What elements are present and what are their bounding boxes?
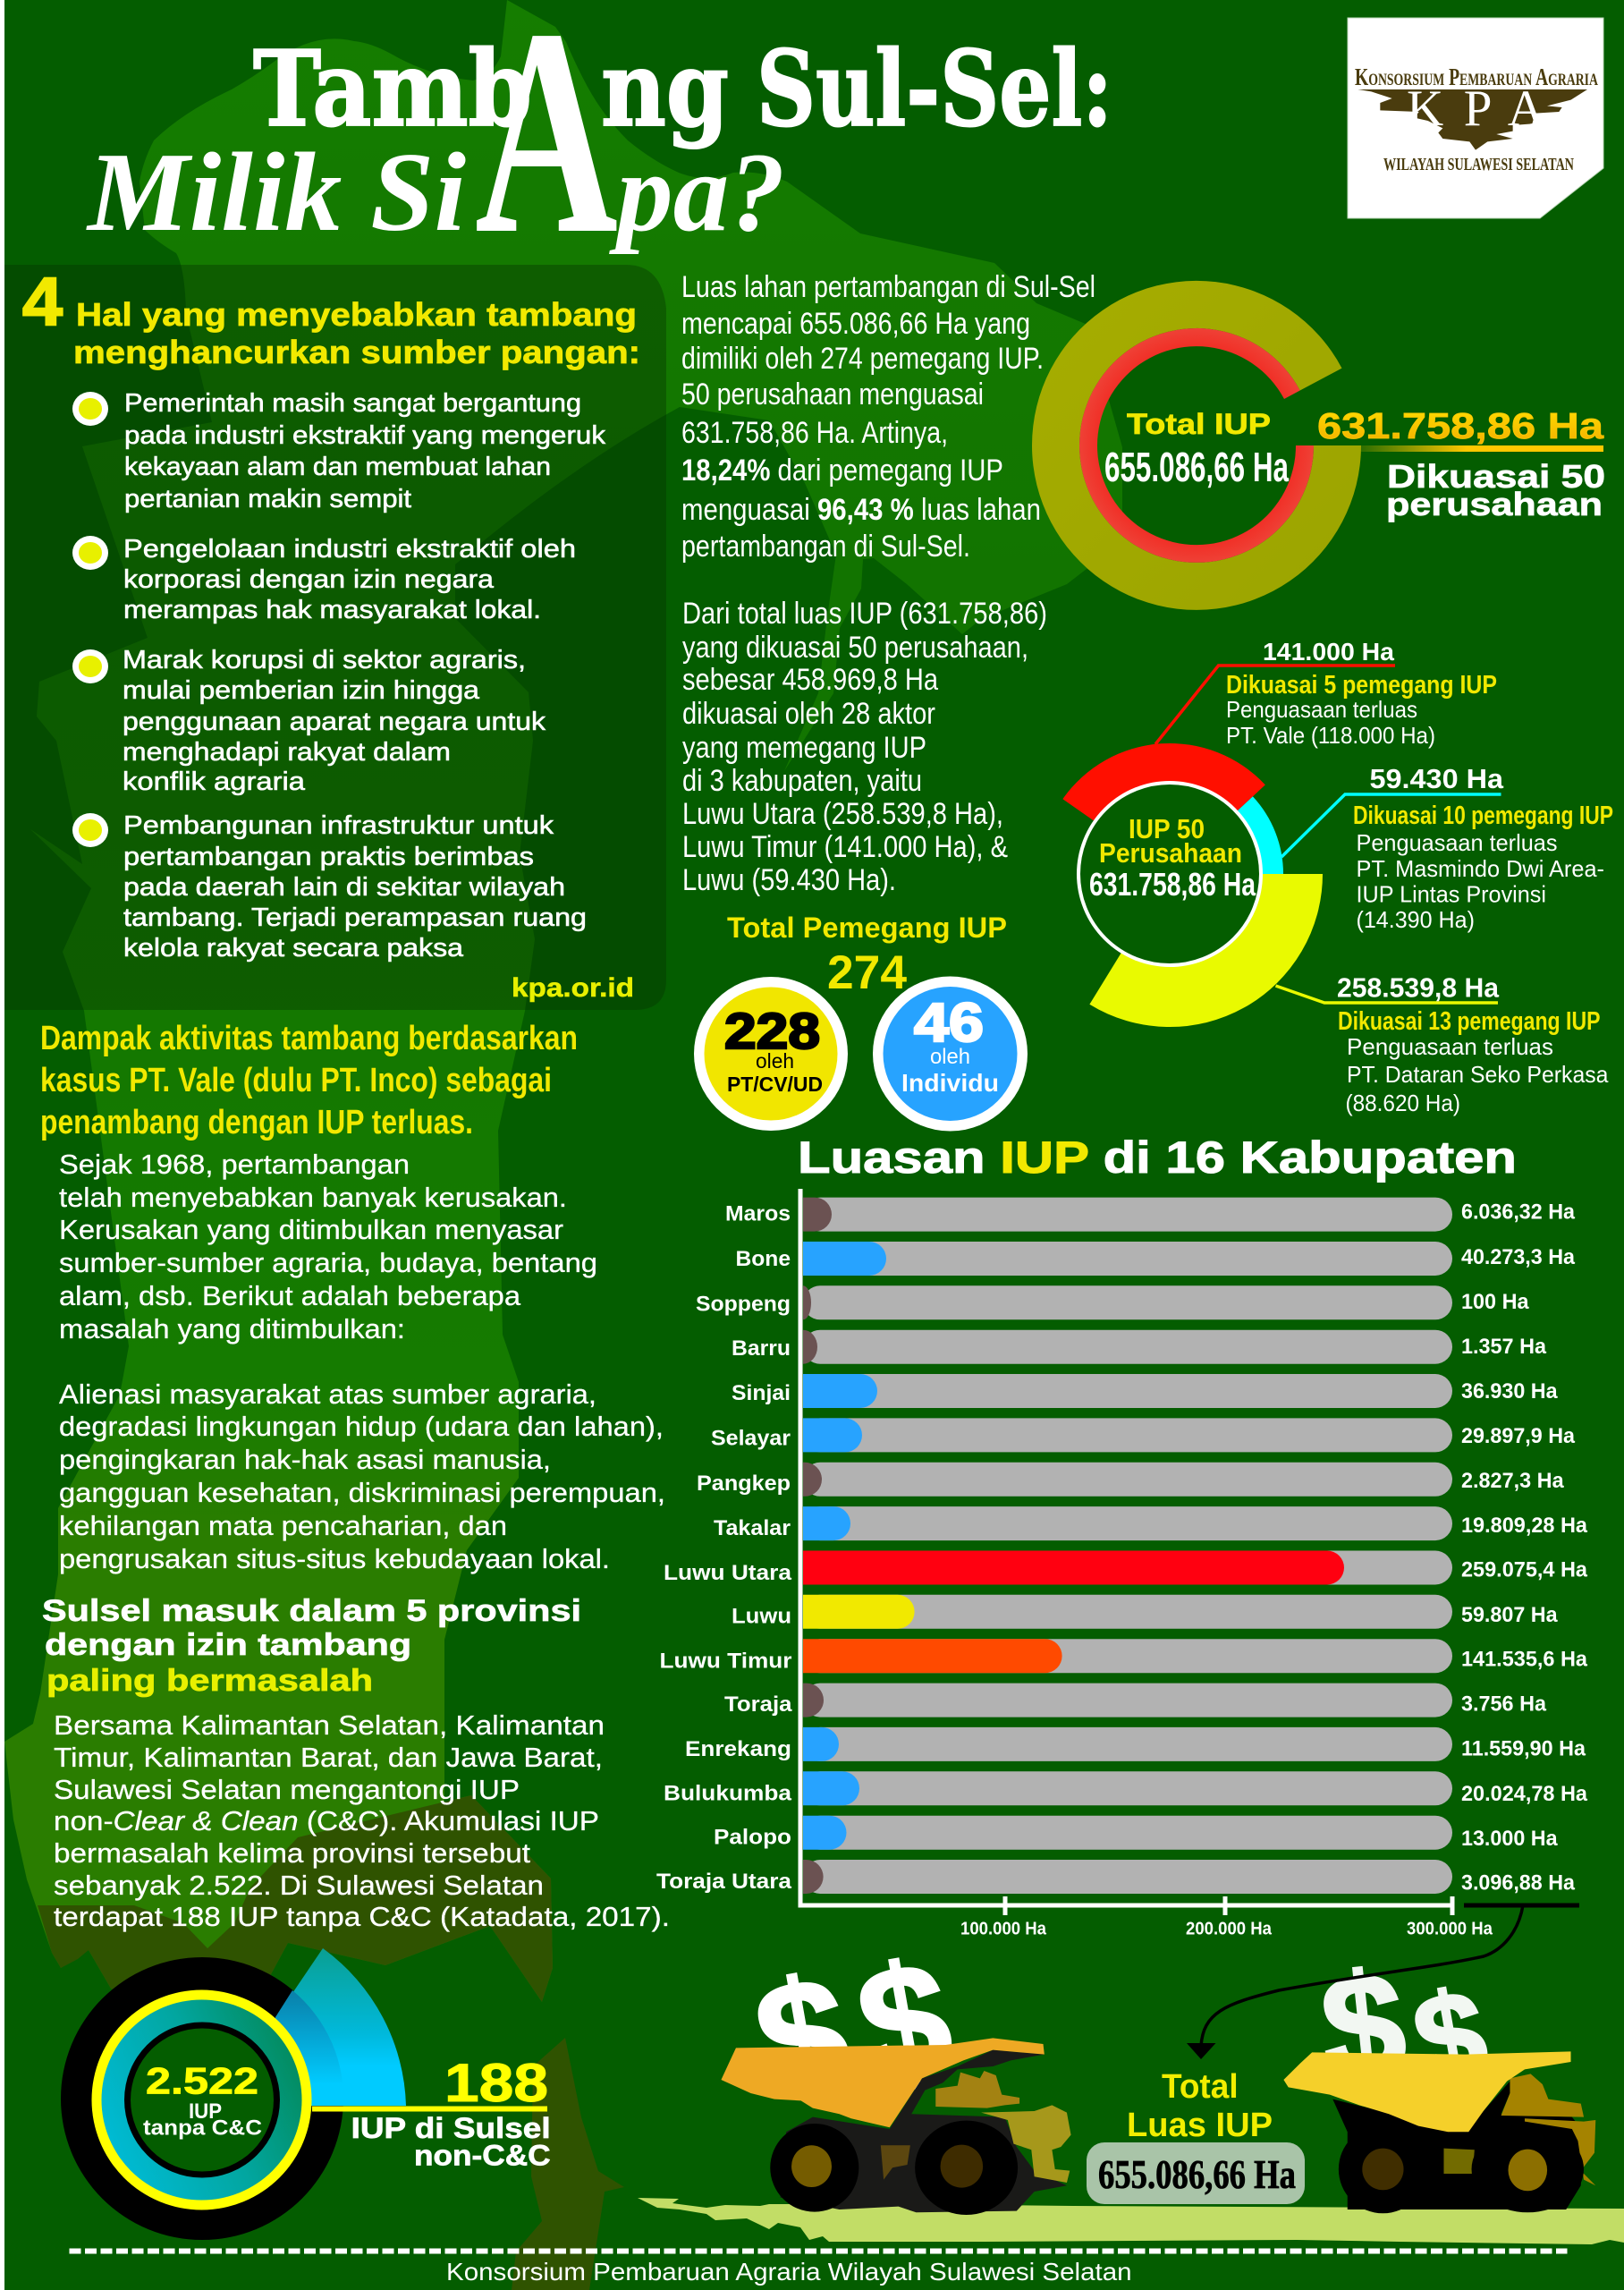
text block: izin non C&C: Bersama Kalimantan Selatan, Kalimantan <box>54 1709 605 1741</box>
text block: dampak <box>59 1149 665 1574</box>
text block: luas lahan: Luas lahan pertambangan di Sul-Sel <box>681 270 1095 304</box>
bar chart: luasan IUP di 16 kabupaten: 19.809,28 Ha <box>1461 1514 1588 1538</box>
bar chart: luasan IUP di 16 kabupaten: Barru <box>732 1336 791 1361</box>
bar chart: luasan IUP di 16 kabupaten: 40.273,3 Ha <box>1461 1245 1576 1269</box>
bar chart: luasan IUP di 16 kabupaten: Luwu Utara <box>664 1561 792 1585</box>
bar chart: luasan IUP di 16 kabupaten: 1.357 Ha <box>1461 1335 1547 1359</box>
circle: 228 PT/CV/UD <box>694 977 848 1131</box>
text block: 50 perusahaan: yang memegang IUP <box>682 731 926 765</box>
text block: izin non C&C: bermasalah kelima provinsi tersebut <box>54 1837 530 1869</box>
total luas IUP callout: 655.086,66 Ha <box>1098 2151 1296 2197</box>
callout: 59.430 Ha: Penguasaan terluas <box>1356 829 1558 856</box>
bar chart: luasan IUP di 16 kabupaten: Soppeng <box>696 1292 791 1316</box>
donut centre label: Perusahaan <box>1099 837 1242 869</box>
donut centre label: 2.522 <box>146 2059 258 2102</box>
main title: ng <box>601 29 729 150</box>
heading: dampak aktivitas tambang: penambang dengan IUP terluas. <box>40 1104 473 1141</box>
text block: luas lahan: 18,24% dari pemegang IUP <box>681 454 1003 488</box>
truck left: $ <box>845 1927 963 2117</box>
text block: luas lahan: 50 perusahaan menguasai <box>681 377 984 411</box>
bullet 4: pertambangan praktis berimbas <box>123 843 534 871</box>
bullet 1: Pemerintah masih sangat bergantung <box>124 389 581 418</box>
bar chart: luasan IUP di 16 kabupaten: Palopo <box>714 1826 791 1850</box>
donut centre label <box>1089 813 1256 903</box>
bar chart: luasan IUP di 16 kabupaten: 36.930 Ha <box>1461 1379 1558 1404</box>
chart: IUP 50 perusahaan donut <box>1062 638 1613 1116</box>
text block: izin non C&C <box>54 1709 670 1932</box>
bullet 3 <box>72 646 546 796</box>
total luas IUP callout: Total <box>1162 2068 1239 2106</box>
bar chart: luasan IUP di 16 kabupaten: Pangkep <box>697 1472 791 1496</box>
callout: 258.539,8 Ha: 258.539,8 Ha <box>1337 971 1500 1004</box>
text block: izin non C&C: terdapat 188 IUP tanpa C&C (Katadata, 2017). <box>54 1901 670 1932</box>
callout: 59.430 Ha: IUP Lintas Provinsi <box>1356 880 1546 907</box>
panel: 4 causes <box>4 264 666 1010</box>
bar chart: luasan IUP di 16 kabupaten: 29.897,9 Ha <box>1461 1424 1576 1448</box>
callout: 141.000 Ha: PT. Vale (118.000 Ha) <box>1226 722 1435 749</box>
text block: dampak: kehilangan mata pencaharian, dan <box>59 1510 507 1541</box>
circle: 228 PT/CV/UD: oleh <box>756 1049 794 1073</box>
bullet 2: Pengelolaan industri ekstraktif oleh <box>123 535 576 564</box>
bar chart: luasan IUP di 16 kabupaten: 20.024,78 Ha <box>1461 1782 1588 1806</box>
bar chart: luasan IUP di 16 kabupaten: 141.535,6 Ha <box>1461 1648 1588 1672</box>
text block: izin non C&C: sebanyak 2.522. Di Sulawesi Selatan <box>54 1870 544 1901</box>
text block: luas lahan <box>681 270 1095 564</box>
text block: dampak: pengingkaran hak-hak asasi manusia, <box>59 1444 551 1475</box>
text block: 50 perusahaan: di 3 kabupaten, yaitu <box>682 764 922 798</box>
bullet 4: kelola rakyat secara paksa <box>123 934 464 963</box>
bullet 1 <box>72 389 606 513</box>
bar chart: luasan IUP di 16 kabupaten: Bulukumba <box>664 1781 792 1805</box>
text block: 50 perusahaan: dikuasai oleh 28 aktor <box>682 697 935 731</box>
bullet 1: kekayaan alam dan membuat lahan <box>124 453 551 481</box>
callout 188 <box>351 2053 551 2172</box>
heading: 4 causes: menghancurkan sumber pangan: <box>73 334 640 370</box>
text block: dampak: Sejak 1968, pertambangan <box>59 1149 410 1180</box>
text block: dampak: gangguan kesehatan, diskriminasi perempuan, <box>59 1477 665 1508</box>
background map lower olive area <box>38 1795 553 2022</box>
callout 631.758,86 Ha: 631.758,86 Ha <box>1317 405 1604 446</box>
truck right <box>1283 1940 1595 2213</box>
value box <box>1087 2142 1305 2204</box>
text block: dampak: Kerusakan yang ditimbulkan menyasar <box>59 1214 563 1245</box>
callout: 59.430 Ha <box>1281 763 1613 933</box>
truck right: $ <box>1404 1962 1496 2113</box>
heading: dampak aktivitas tambang <box>40 1020 578 1141</box>
dollar signs: $ <box>1314 1940 1413 2112</box>
bar chart: luasan IUP di 16 kabupaten: 2.827,3 Ha <box>1461 1469 1564 1493</box>
bar chart: luasan IUP di 16 kabupaten: 3.096,88 Ha <box>1461 1871 1576 1896</box>
connector line <box>312 2106 547 2111</box>
text block: 50 perusahaan: Luwu (59.430 Ha). <box>682 863 896 897</box>
heading: sulsel masuk 5 provinsi <box>42 1594 581 1698</box>
callout: 258.539,8 Ha: (88.620 Ha) <box>1345 1090 1460 1116</box>
text block: luas lahan: 631.758,86 Ha. Artinya, <box>681 416 948 450</box>
bullet 1: pertanian makin sempit <box>124 485 411 513</box>
callout: 141.000 Ha: Dikuasai 5 pemegang IUP <box>1226 671 1497 700</box>
bar chart: luasan IUP di 16 kabupaten: 100 Ha <box>1461 1290 1529 1314</box>
text block: dampak: Alienasi masyarakat atas sumber agraria, <box>59 1378 596 1410</box>
bar chart: luasan IUP di 16 kabupaten: Toraja <box>724 1692 792 1717</box>
text block: izin non C&C: non-Clear & Clean (C&C). Akumulasi IUP <box>54 1805 599 1836</box>
bullet 3: konflik agraria <box>123 768 306 796</box>
chart axes: 100.000 Ha <box>960 1920 1047 1939</box>
main title: pa? <box>609 131 785 255</box>
bar chart: luasan IUP di 16 kabupaten: Luwu Timur <box>660 1649 792 1673</box>
main title: Sul-Sel: <box>757 29 1112 150</box>
bar chart: luasan IUP di 16 kabupaten: Enrekang <box>685 1737 791 1761</box>
bar chart: luasan IUP di 16 kabupaten: 259.075,4 Ha <box>1461 1557 1588 1582</box>
bar chart: luasan IUP di 16 kabupaten: 11.559,90 Ha <box>1461 1736 1586 1760</box>
bar chart: luasan IUP di 16 kabupaten: 59.807 Ha <box>1461 1603 1558 1627</box>
bullet 3: menghadapi rakyat dalam <box>123 738 451 767</box>
chart: total IUP donut <box>1032 281 1605 610</box>
callout 188: non-C&C <box>414 2140 551 2172</box>
donut centre label: IUP <box>189 2099 222 2124</box>
text block: dampak: alam, dsb. Berikut adalah beberapa <box>59 1280 521 1311</box>
text block: 50 perusahaan: sebesar 458.969,8 Ha <box>682 663 938 697</box>
callout: 59.430 Ha: 59.430 Ha <box>1370 763 1504 794</box>
chart axes: 300.000 Ha <box>1407 1920 1493 1939</box>
bar chart: luasan IUP di 16 kabupaten: 13.000 Ha <box>1461 1827 1558 1851</box>
bullet 3: penggunaan aparat negara untuk <box>123 708 546 736</box>
callout dikuasai 50 perusahaan: Dikuasai 50 <box>1387 458 1605 495</box>
chart axes: 200.000 Ha <box>1186 1920 1273 1939</box>
bar chart: luasan IUP di 16 kabupaten: Takalar <box>714 1516 791 1540</box>
total pemegang IUP: Total Pemegang IUP <box>727 912 1007 944</box>
text block: luas lahan: menguasai 96,43 % luas lahan <box>681 493 1041 527</box>
bullet 2: merampas hak masyarakat lokal. <box>123 596 541 624</box>
text block: luas lahan: pertambangan di Sul-Sel. <box>681 530 970 564</box>
text block: dampak: masalah yang ditimbulkan: <box>59 1313 405 1344</box>
callout 188: IUP di Sulsel <box>351 2112 551 2144</box>
donut centre label: 655.086,66 Ha <box>1104 444 1289 490</box>
bullet 4: tambang. Terjadi perampasan ruang <box>123 903 587 932</box>
bullet 1: pada industri ekstraktif yang mengeruk <box>124 421 606 450</box>
donut centre label <box>143 2059 262 2140</box>
heading: 4 causes: 4 <box>22 264 63 340</box>
heading: 4 causes <box>22 264 640 370</box>
footer rule <box>70 2249 1567 2254</box>
bullet 3: Marak korupsi di sektor agraris, <box>123 646 526 674</box>
callout: 258.539,8 Ha: Penguasaan terluas <box>1347 1033 1553 1060</box>
arrow connector <box>1187 1905 1579 2059</box>
donut centre label: tanpa C&C <box>143 2116 262 2140</box>
title line one: Tamb <box>253 29 532 150</box>
callout: 258.539,8 Ha <box>1275 971 1609 1116</box>
callout 188: 188 <box>444 2053 548 2113</box>
heading: sulsel masuk 5 provinsi: paling bermasalah <box>47 1664 373 1698</box>
text block: 50 perusahaan: yang dikuasai 50 perusahaan, <box>682 631 1028 665</box>
background map silhouette <box>4 0 1122 2022</box>
source kpa.or.id: kpa.or.id <box>512 973 634 1003</box>
bar chart: luasan IUP di 16 kabupaten: Maros <box>725 1201 791 1226</box>
chart axes <box>800 1189 1493 1939</box>
text block: 50 perusahaan: Luwu Timur (141.000 Ha), & <box>682 830 1008 864</box>
heading: sulsel masuk 5 provinsi: dengan izin tambang <box>45 1628 411 1662</box>
bar chart: luasan IUP di 16 kabupaten <box>656 1132 1588 1939</box>
bullet 4: Pembangunan infrastruktur untuk <box>123 811 554 840</box>
callout: 59.430 Ha: PT. Masmindo Dwi Area- <box>1356 855 1604 882</box>
bar chart: luasan IUP di 16 kabupaten: 3.756 Ha <box>1461 1692 1547 1716</box>
callout: 141.000 Ha: Penguasaan terluas <box>1226 696 1417 723</box>
ground strip <box>638 2198 1624 2244</box>
text block: dampak: sumber-sumber agraria, budaya, bentang <box>59 1247 597 1278</box>
total luas IUP callout <box>1087 2068 1305 2204</box>
bar chart: luasan IUP di 16 kabupaten: Bone <box>735 1247 791 1271</box>
text block: luas lahan: mencapai 655.086,66 Ha yang <box>681 307 1030 341</box>
text block: 50 perusahaan: Dari total luas IUP (631.758,86) <box>682 597 1047 631</box>
heading: 4 causes: Hal yang menyebabkan tambang <box>76 296 637 333</box>
bar chart: luasan IUP di 16 kabupaten: Luwu <box>732 1605 791 1628</box>
title line two: Milik Si <box>86 131 466 255</box>
bullet 3: mulai pemberian izin hingga <box>123 676 480 705</box>
bullet 4: pada daerah lain di sekitar wilayah <box>123 873 565 902</box>
bullet 2 <box>72 535 576 624</box>
bullet 2: korporasi dengan izin negara <box>123 565 495 594</box>
total luas IUP callout: Luas IUP <box>1127 2107 1273 2144</box>
circle: 228 PT/CV/UD: 228 <box>724 1003 820 1060</box>
heading: sulsel masuk 5 provinsi: Sulsel masuk dalam 5 provinsi <box>42 1594 581 1628</box>
circle: 46 individu <box>873 977 1028 1131</box>
callout dikuasai 50 perusahaan: perusahaan <box>1386 486 1603 522</box>
donut centre label: 631.758,86 Ha <box>1089 866 1256 903</box>
text block: izin non C&C: Timur, Kalimantan Barat, dan Jawa Barat, <box>54 1742 603 1773</box>
callout: 141.000 Ha <box>1155 638 1497 749</box>
total pemegang IUP <box>694 912 1028 1131</box>
callout: 59.430 Ha: (14.390 Ha) <box>1356 906 1475 933</box>
truck left <box>721 1927 1071 2215</box>
circle: 46 individu: Individu <box>901 1069 999 1097</box>
main title <box>86 0 1112 295</box>
chart title: Luasan IUP di 16 Kabupaten <box>798 1132 1517 1183</box>
text block: 50 perusahaan <box>682 597 1047 897</box>
bullet 4 <box>72 811 587 963</box>
bar chart: luasan IUP di 16 kabupaten: Sinjai <box>732 1381 791 1405</box>
text block: dampak: telah menyebabkan banyak kerusakan. <box>59 1182 567 1213</box>
text block: dampak: degradasi lingkungan hidup (udara dan lahan), <box>59 1411 664 1442</box>
bar chart: luasan IUP di 16 kabupaten: 6.036,32 Ha <box>1461 1200 1576 1225</box>
callout: 141.000 Ha: 141.000 Ha <box>1263 638 1394 666</box>
logo KPA: KPA <box>1407 81 1544 137</box>
dollar signs: $ <box>743 1942 861 2133</box>
footer text: Konsorsium Pembaruan Agraria Wilayah Sulawesi Selatan <box>446 2258 1132 2286</box>
heading: dampak aktivitas tambang: kasus PT. Vale (dulu PT. Inco) sebagai <box>40 1062 552 1099</box>
circle: 228 PT/CV/UD: PT/CV/UD <box>727 1073 823 1096</box>
donut centre label: Total IUP <box>1127 408 1271 440</box>
logo KPA <box>1348 18 1603 218</box>
bar chart: luasan IUP di 16 kabupaten: Toraja Utara <box>656 1870 792 1894</box>
text block: luas lahan: dimiliki oleh 274 pemegang IUP. <box>681 342 1044 376</box>
donut centre label <box>1104 408 1289 490</box>
callout: 258.539,8 Ha: PT. Dataran Seko Perkasa <box>1347 1061 1609 1088</box>
bar chart: luasan IUP di 16 kabupaten: Selayar <box>711 1427 791 1451</box>
background map lower olive strip <box>512 2038 624 2290</box>
text block: izin non C&C: Sulawesi Selatan mengantongi IUP <box>54 1774 520 1805</box>
total pemegang IUP: 274 <box>827 946 908 999</box>
circle: 46 individu: oleh <box>930 1045 970 1069</box>
callout rule <box>1361 445 1603 452</box>
donut centre label: IUP 50 <box>1129 813 1205 844</box>
heading: dampak aktivitas tambang: Dampak aktivitas tambang berdasarkan <box>40 1020 578 1057</box>
callout dikuasai 50 perusahaan <box>1386 458 1605 522</box>
text block: 50 perusahaan: Luwu Utara (258.539,8 Ha), <box>682 797 1003 831</box>
text block: dampak: pengrusakan situs-situs kebudayaan lokal. <box>59 1543 610 1574</box>
chart: non C&C radial <box>61 1948 551 2240</box>
circle: 46 individu: 46 <box>914 992 984 1053</box>
